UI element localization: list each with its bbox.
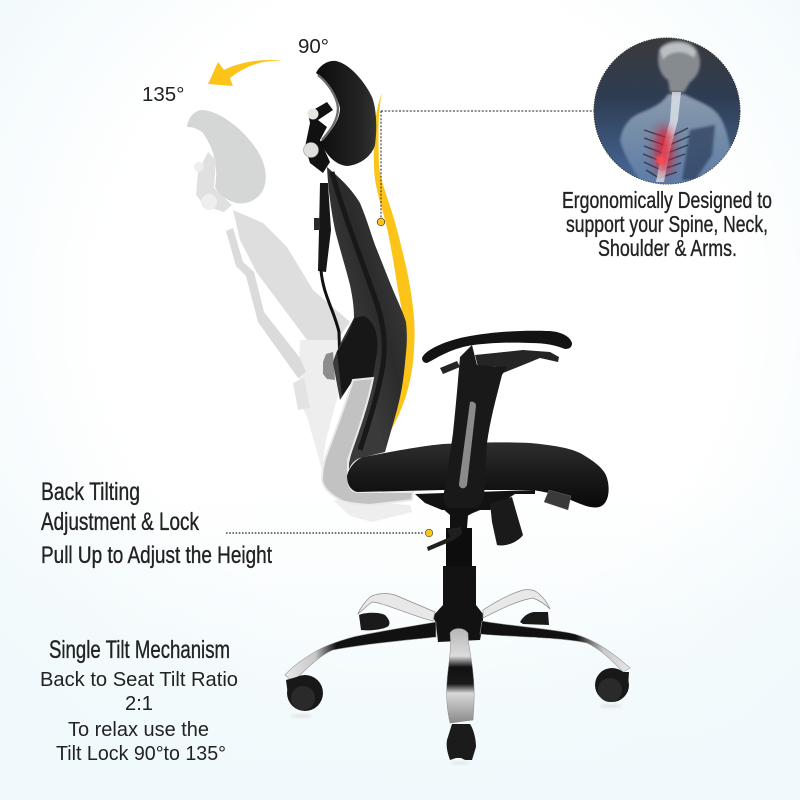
faded stem	[226, 228, 306, 378]
seat mount neck	[442, 508, 485, 528]
faded knob	[293, 378, 310, 410]
caster left	[286, 675, 323, 711]
callout text: ergonomics: Shoulder & Arms.	[598, 235, 737, 261]
seat underside mechanism	[415, 490, 535, 510]
rear base leg left	[358, 594, 435, 621]
dark shoulder shadow	[682, 125, 715, 180]
column sleeve	[433, 566, 483, 642]
text: back tilting adjustment: Adjustment & Lock	[41, 508, 199, 536]
text: single tilt mechanism	[40, 636, 238, 765]
callout text: ergonomics	[562, 187, 772, 261]
armrest lower pad	[440, 350, 559, 374]
label: 90 degrees: 90°	[298, 35, 329, 58]
dotted leader: spine	[381, 111, 594, 218]
seat	[347, 442, 609, 507]
ribs	[643, 128, 690, 178]
right base leg	[480, 621, 630, 672]
red pain glow	[655, 126, 673, 174]
caster right	[595, 668, 629, 702]
tilt knob	[323, 352, 335, 380]
spine column	[656, 92, 681, 182]
text: back tilting adjustment	[41, 478, 272, 569]
faded lower frame	[298, 340, 338, 470]
yellow dot: height marker	[425, 529, 433, 537]
label: 135 degrees: 135°	[142, 83, 184, 106]
head	[658, 41, 700, 92]
torso	[620, 94, 734, 190]
gas lift lower	[446, 528, 472, 568]
armrest grey insert	[459, 402, 476, 488]
headrest bracket	[305, 102, 333, 173]
headrest inner edge	[318, 75, 338, 140]
armrest upright	[443, 345, 507, 517]
height lever	[427, 527, 462, 551]
faded back panel	[233, 210, 350, 340]
faded seat ghost	[333, 500, 412, 522]
caster floor reflections	[290, 704, 622, 765]
skull highlight	[660, 43, 696, 60]
left base leg	[285, 622, 436, 682]
backrest	[327, 167, 407, 476]
faded headrest	[187, 110, 266, 204]
yellow dot: spine marker	[377, 218, 385, 226]
backrest mesh groove	[332, 172, 384, 450]
headrest	[316, 61, 376, 166]
caster front	[447, 724, 476, 760]
text: single tilt mechanism: Back to Seat Tilt Ratio	[40, 668, 238, 691]
recline arrow	[208, 60, 283, 86]
caster back left	[359, 613, 389, 630]
silver bracket	[322, 378, 413, 505]
side lever knob	[490, 497, 523, 545]
text: single tilt mechanism: 2:1	[125, 692, 153, 715]
text: single tilt mechanism: To relax use the	[68, 718, 209, 741]
faded headrest bracket	[196, 152, 232, 212]
text: back tilting adjustment: Pull Up to Adjust the Height	[41, 542, 272, 569]
front base leg	[447, 628, 474, 723]
spine illustration circle	[594, 38, 740, 190]
backrest frame	[337, 316, 378, 396]
dotted leader: height adjust	[226, 532, 424, 534]
seat tag	[544, 490, 571, 510]
spine curve line	[374, 93, 415, 443]
armrest top pad	[422, 331, 572, 363]
text: single tilt mechanism: Tilt Lock 90°to 135°	[56, 742, 226, 765]
text: single tilt mechanism: Single Tilt Mechanism	[49, 636, 230, 664]
rear base leg right	[483, 590, 550, 618]
faded tilted chair at 135 degrees	[187, 110, 412, 522]
caster back right	[520, 612, 549, 625]
text: back tilting adjustment: Back Tilting	[41, 478, 140, 506]
chair	[285, 61, 630, 765]
rear stem and cable	[314, 183, 340, 372]
headrest knobs	[308, 108, 318, 120]
